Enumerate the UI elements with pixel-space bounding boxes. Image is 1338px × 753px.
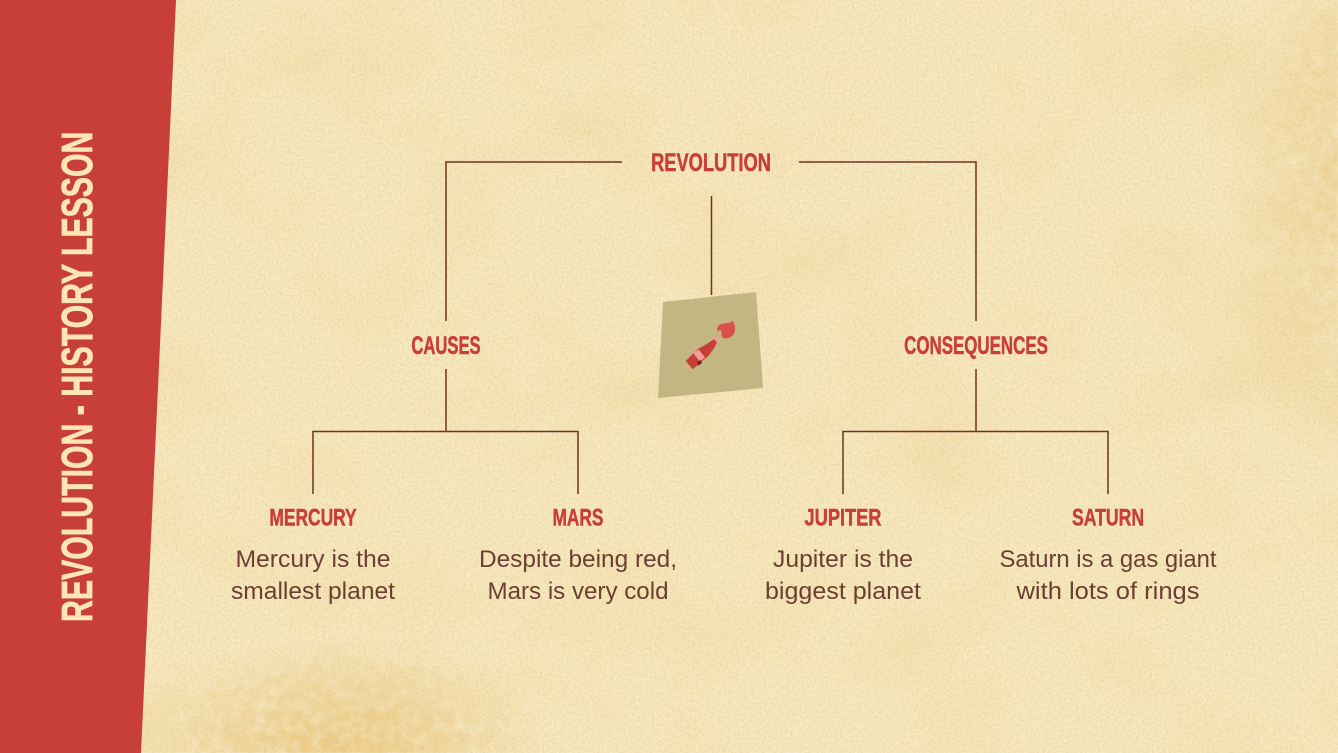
heading: consequences: CONSEQUENCES — [904, 332, 1048, 360]
title: vertical sidebar heading: REVOLUTION - HISTORY LESSON — [54, 132, 102, 622]
item: mars — [479, 505, 677, 605]
icon: molotov cocktail on olive card — [658, 292, 763, 398]
item: jupiter — [765, 503, 921, 605]
flame — [717, 321, 735, 338]
item: jupiter: Jupiter is the — [773, 546, 913, 573]
panel: red sidebar — [0, 0, 176, 753]
item: mercury: smallest planet — [231, 578, 395, 605]
item: saturn: SATURN — [1072, 504, 1144, 531]
heading: revolution: REVOLUTION — [651, 148, 771, 177]
item: saturn — [1000, 504, 1217, 605]
item: saturn: Saturn is a gas giant — [1000, 546, 1217, 573]
bottle — [686, 336, 719, 369]
olive card — [658, 292, 763, 398]
item: mars: MARS — [553, 505, 603, 531]
item: jupiter: biggest planet — [765, 578, 921, 605]
item: mercury: MERCURY — [269, 504, 357, 531]
item: jupiter: JUPITER — [805, 503, 882, 531]
tree connector lines — [313, 162, 1108, 494]
heading: causes: CAUSES — [411, 333, 481, 360]
item: mercury: Mercury is the — [236, 546, 390, 573]
item: mars: Mars is very cold — [488, 578, 668, 605]
item: mars: Despite being red, — [479, 546, 677, 573]
item: saturn: with lots of rings — [1015, 578, 1200, 605]
item: mercury — [231, 504, 395, 605]
